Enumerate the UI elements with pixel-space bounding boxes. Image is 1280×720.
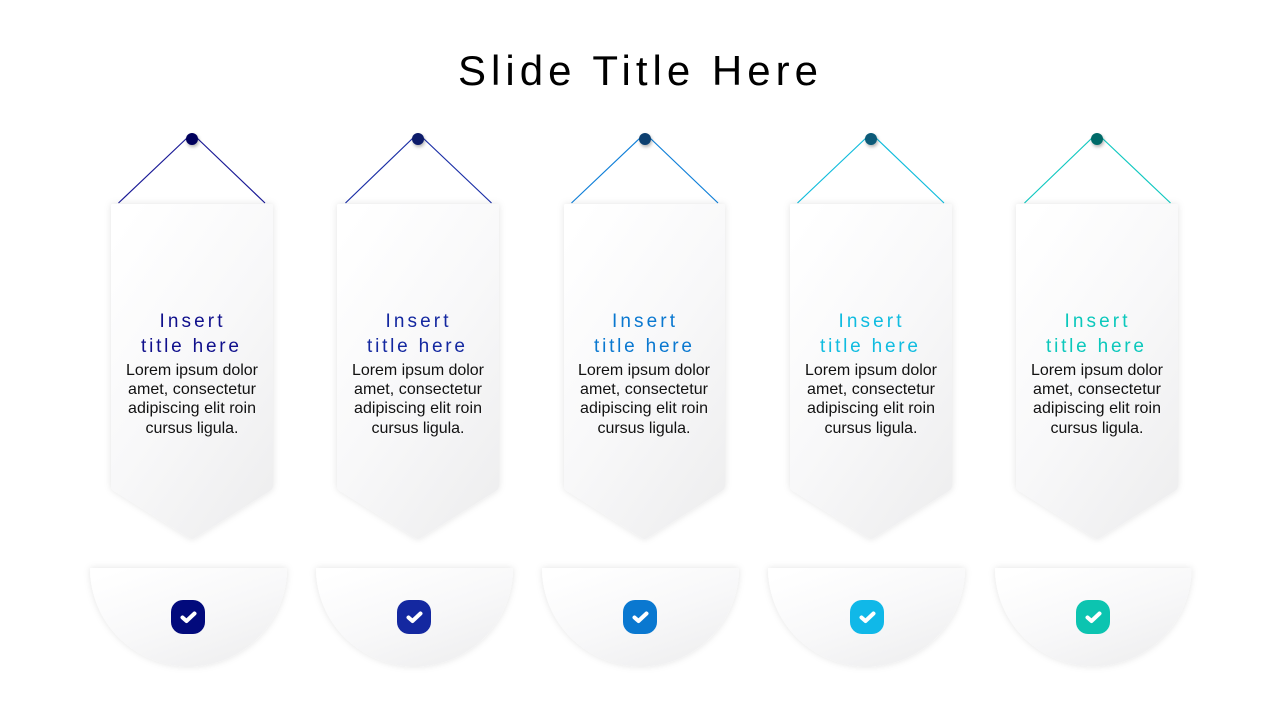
banner title 4 [820,311,918,357]
banner 1 [111,204,273,539]
body text 1: amet, consectetur [128,381,257,398]
panel: column 2 [316,133,513,666]
pin 2 [412,133,424,145]
body text 1: cursus ligula. [146,420,238,437]
body text 4: adipiscing elit roin [807,400,935,417]
banner 4 [790,204,952,539]
panel: column 4 [768,133,965,666]
body text 5: adipiscing elit roin [1033,400,1161,417]
half circle 5 [995,568,1192,666]
hanger lines 2 [346,138,492,203]
pin 1 [186,133,198,145]
body text 4: amet, consectetur [807,381,936,398]
banner 3 [564,204,725,539]
panel: column 5 [995,133,1192,666]
hanger lines 4 [798,138,944,203]
half circle 3 [542,568,739,666]
banner title 5: Insert [1064,311,1128,332]
body text 2 [352,362,485,437]
banner title 3: Insert [612,311,676,332]
hanger lines 1 [118,138,265,203]
body text 2: adipiscing elit roin [354,400,482,417]
banner title 1 [141,311,239,357]
banner title 3 [594,311,692,357]
body text 4 [805,362,938,437]
banner title 2: Insert [386,311,449,332]
banner title 4: Insert [838,311,902,332]
panel: column 3 [542,133,739,666]
body text 5 [1031,362,1164,437]
body text 5: amet, consectetur [1033,381,1162,398]
body text 3: Lorem ipsum dolor [578,362,711,379]
banner title 1: title here [141,336,239,357]
banner title 2: title here [367,336,465,357]
icon: check 2 [397,600,431,634]
body text 4: cursus ligula. [824,420,918,437]
banner 2 [337,204,499,539]
body text 1: Lorem ipsum dolor [126,362,259,379]
hanger lines 3 [572,138,718,203]
half circle 4 [768,568,965,666]
banner title 5 [1046,311,1144,357]
body text 3: cursus ligula. [598,420,690,437]
title: Slide Title Here [458,47,818,94]
body text 5: Lorem ipsum dolor [1031,362,1164,379]
pin 4 [865,133,877,145]
body text 3 [578,362,711,437]
icon: check 3 [623,600,657,634]
pin 5 [1091,133,1103,145]
body text 2: cursus ligula. [372,420,464,437]
pin 3 [639,133,651,145]
body text 2: Lorem ipsum dolor [352,362,485,379]
icon: check 1 [171,600,205,634]
banner 5 [1016,204,1178,539]
icon: check 5 [1076,600,1110,634]
body text 4: Lorem ipsum dolor [805,362,938,379]
body text 3: amet, consectetur [580,381,709,398]
icon: check 4 [850,600,884,634]
banner title 4: title here [820,336,918,357]
panel: column 1 [90,133,287,666]
banner title 3: title here [594,336,692,357]
banner title 2 [367,311,465,357]
body text 5: cursus ligula. [1050,420,1144,437]
body text 2: amet, consectetur [354,381,483,398]
hanger lines 5 [1024,138,1170,203]
half circle 2 [316,568,513,666]
body text 1: adipiscing elit roin [128,400,256,417]
body text 3: adipiscing elit roin [580,400,708,417]
body text 1 [126,362,259,437]
half circle 1 [90,568,287,666]
banner title 1: Insert [160,311,223,332]
banner title 5: title here [1046,336,1144,357]
